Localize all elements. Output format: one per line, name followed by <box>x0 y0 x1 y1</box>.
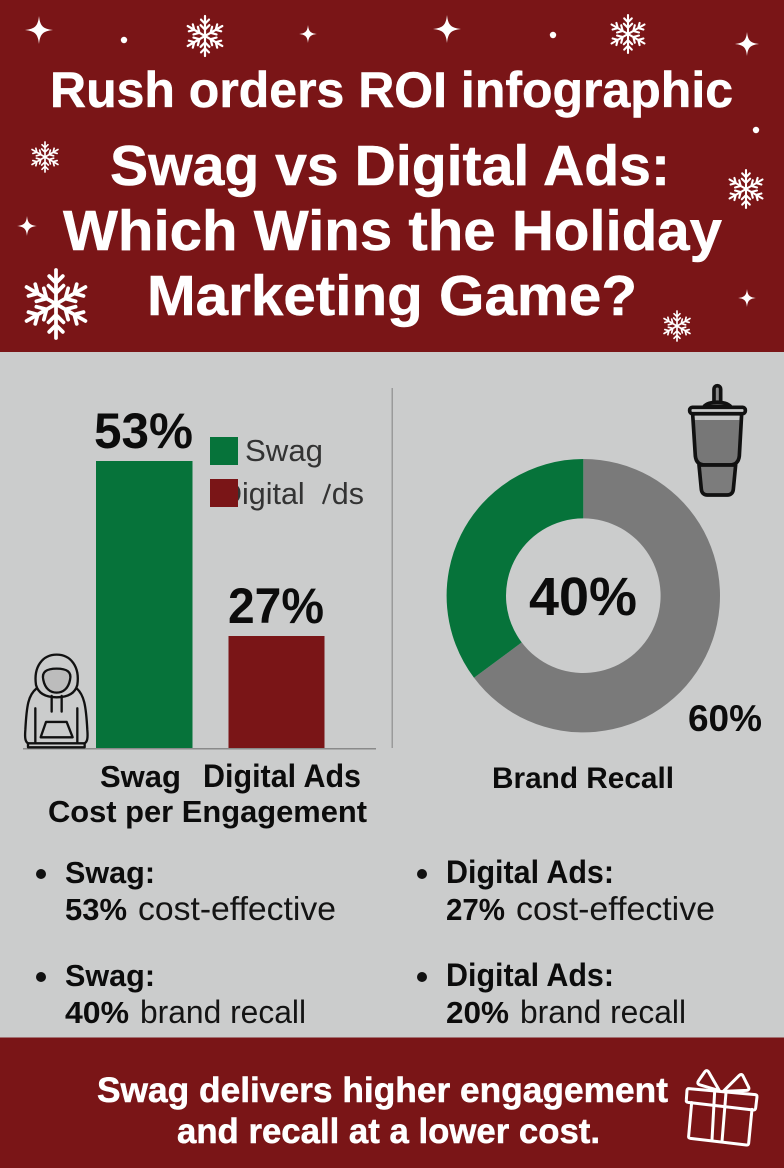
panel: cost per engagement bar chart <box>23 403 376 829</box>
chart title: brand recall: Brand Recall <box>492 762 674 795</box>
legend: Digital Ads <box>220 476 364 511</box>
text block: swag recall: Swag: <box>65 958 155 993</box>
donut: gray segment <box>474 459 720 732</box>
heading: main title <box>63 134 722 328</box>
bar: digital ads <box>228 636 324 748</box>
donut: green segment <box>447 459 583 678</box>
heading: main title: Swag vs Digital Ads: <box>110 134 670 198</box>
value: 60%: 60% <box>688 698 762 739</box>
text block: swag cost <box>36 855 336 927</box>
heading: top title: Rush orders ROI infographic <box>50 62 733 118</box>
text block: digital ads recall: 20% <box>446 995 509 1030</box>
footer conclusion text: and recall at a lower cost. <box>177 1112 600 1151</box>
chart axis <box>23 748 376 750</box>
panel: brand recall donut chart <box>447 386 762 795</box>
text block: digital ads recall: brand recall <box>520 994 686 1030</box>
text block: swag cost: 53% <box>65 892 127 927</box>
text block: swag recall <box>36 958 306 1030</box>
text block: digital ads cost: cost-effective <box>516 890 715 927</box>
text block: digital ads cost: 27% <box>446 892 505 927</box>
value: 27%: 27% <box>228 578 324 634</box>
footer conclusion text <box>97 1071 668 1151</box>
axis label: digital ads: Digital Ads <box>203 758 361 794</box>
value: 40%: 40% <box>529 567 637 627</box>
text block: swag cost: cost-effective <box>138 890 336 927</box>
icon: hoodie <box>25 655 88 747</box>
icon: tumbler <box>690 386 745 495</box>
text block: digital ads recall: Digital Ads: <box>446 957 614 993</box>
legend: Swag <box>245 433 323 468</box>
heading: main title: Which Wins the Holiday <box>63 199 722 263</box>
icon: gift box <box>686 1071 757 1145</box>
text block: digital ads cost: Digital Ads: <box>446 854 614 890</box>
center divider <box>392 388 393 748</box>
text block: swag recall: brand recall <box>140 994 306 1030</box>
axis label: swag: Swag <box>100 759 181 794</box>
text block: digital ads recall <box>417 957 686 1030</box>
footer conclusion text: Swag delivers higher engagement <box>97 1071 668 1110</box>
decorative snowflakes and sparkles <box>17 15 765 341</box>
bar: swag <box>96 461 192 748</box>
heading: main title: Marketing Game? <box>147 264 637 328</box>
text block: digital ads cost <box>417 854 715 927</box>
panel: header banner <box>0 0 784 352</box>
value: 53%: 53% <box>94 403 193 459</box>
chart title: Cost per Engagement <box>48 794 367 829</box>
legend <box>210 433 364 511</box>
text block: swag cost: Swag: <box>65 855 155 890</box>
text block: swag recall: 40% <box>65 995 129 1030</box>
panel: footer banner <box>0 1038 784 1168</box>
